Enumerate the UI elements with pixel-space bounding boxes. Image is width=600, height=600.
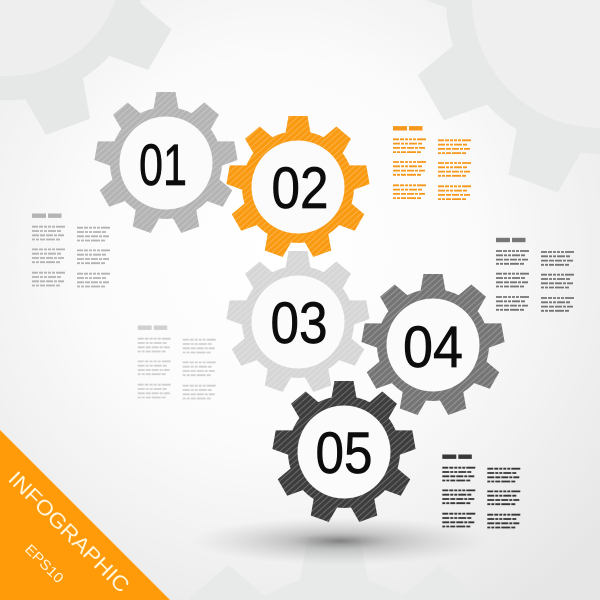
text block: grey left [32,214,110,286]
gear 02 [223,112,373,262]
gear 01 [91,88,241,238]
number 05: 05 [316,421,372,486]
number 03: 03 [270,291,328,356]
background gears: top [0,0,600,195]
text block: orange [393,126,471,199]
gear 04 [358,270,508,420]
gear 05 [269,377,419,527]
banner subtitle: EPS10 [22,541,67,586]
number 02: 02 [272,156,328,221]
shadow under gears [190,517,490,565]
banner title: INFOGRAPHIC [3,467,134,597]
text block: light grey [138,326,216,398]
number 04: 04 [403,315,463,380]
text block: black [442,454,520,528]
gear 03 [223,247,373,397]
corner banner [0,430,170,600]
background gear: bottom [189,537,479,600]
background gear: top left [0,0,186,137]
background gear: top right [418,0,590,192]
text block: dark grey [496,238,574,311]
number 01: 01 [139,133,187,198]
